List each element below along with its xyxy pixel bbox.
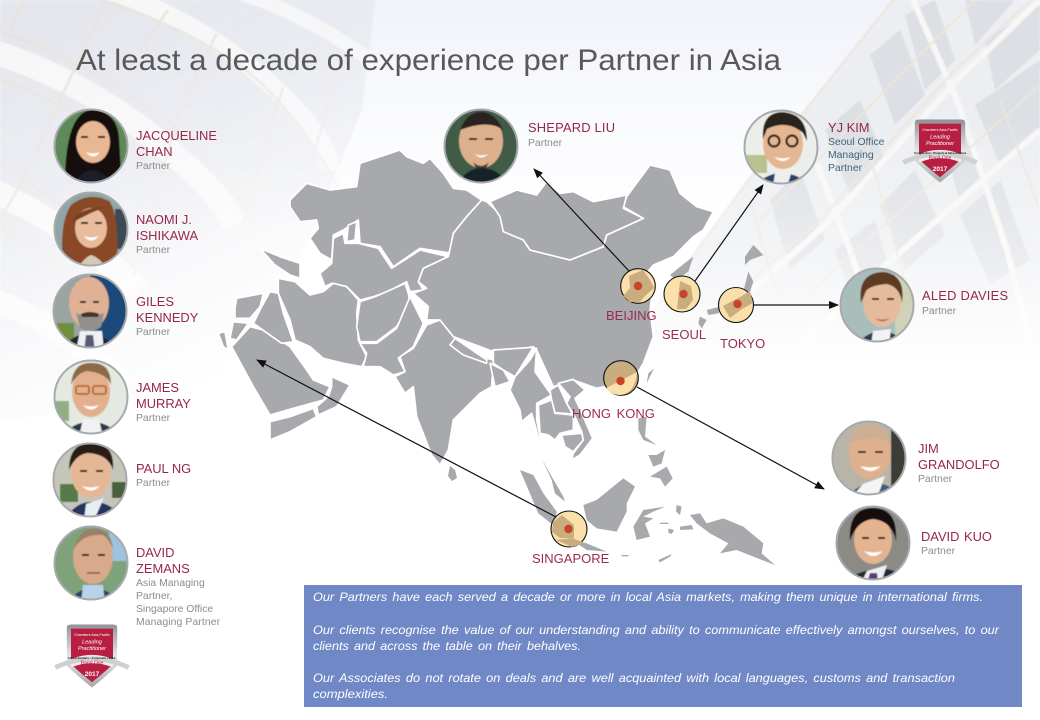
arrow: Seoul to YJ Kim (695, 185, 763, 281)
west and central Asia countries (218, 150, 713, 465)
name and role: KENNEDY (136, 310, 199, 325)
partner: Giles Kennedy (50, 271, 199, 351)
name and role: Partner (918, 474, 953, 485)
marker: Beijing (621, 269, 655, 303)
name and role: YJ KIM (828, 120, 870, 135)
name and role: ALED DAVIES (922, 288, 1008, 303)
name and role: MURRAY (136, 396, 191, 411)
south-east Asia mainland (490, 347, 593, 460)
badge: Chambers Asia-Pacific, David Zemans: Chambers Asia-Pacific (74, 633, 110, 637)
badge: Chambers Asia-Pacific, David Zemans: Practitioner (78, 646, 107, 652)
city label: Singapore: SINGAPORE (532, 551, 610, 566)
portrait: David Kuo (836, 506, 910, 580)
portrait: YJ Kim (744, 110, 818, 184)
name and role: Partner (136, 245, 171, 256)
portrait: Aled Davies (840, 268, 914, 342)
islands: Japan, Korea, Taiwan, Indonesia, Philippines, New Guinea (448, 245, 775, 565)
arrow: Hong Kong to Jim Grandolfo and David Kuo (637, 387, 824, 489)
name and role: JAMES (136, 380, 179, 395)
partner: David Zemans (51, 523, 221, 628)
callout paragraph 2: clients and across the table on their behalves. (313, 639, 581, 653)
name and role: Partner (922, 306, 957, 317)
badge: Chambers Asia-Pacific, YJ Kim: Chambers Asia-Pacific (922, 128, 958, 132)
badge: Chambers Asia-Pacific, David Zemans: David Zemans - Corporate / M&A (68, 656, 116, 660)
name and role: Partner, (136, 591, 172, 602)
badge: Chambers Asia-Pacific, YJ Kim: 2017 (933, 166, 948, 173)
partner: Aled Davies (837, 265, 1008, 345)
name and role (918, 441, 1000, 485)
title: At least a decade of experience per Partner in Asia (76, 44, 781, 77)
name and role (922, 288, 1008, 317)
arrow: Beijing to Shepard Liu (534, 169, 629, 271)
badge: Chambers Asia-Pacific, David Zemans (54, 624, 130, 687)
partner: James Murray (51, 357, 191, 437)
name and role: Asia Managing (136, 578, 205, 589)
portrait: David Zemans (54, 526, 128, 600)
map of Asia (218, 150, 775, 565)
partner: YJ Kim (741, 107, 885, 187)
badge: Chambers Asia-Pacific, David Zemans: 2017 (85, 671, 100, 678)
name and role: JIM (918, 441, 939, 456)
callout paragraph 1: Our Partners have each served a decade or more in local Asia markets, making them unique in international firms. (313, 590, 983, 604)
marker: Tokyo (718, 288, 754, 322)
name and role: SHEPARD LIU (528, 120, 615, 135)
partner: Shepard Liu (441, 106, 615, 186)
partner: David Kuo (833, 503, 992, 583)
name and role: NAOMI J. (136, 212, 192, 227)
badge: Chambers Asia-Pacific, David Zemans: Band One (81, 660, 104, 666)
portrait: Naomi J. Ishikawa (54, 192, 128, 266)
portrait: Jacqueline Chan (54, 108, 128, 184)
name and role (528, 120, 615, 149)
name and role: Partner (136, 413, 171, 424)
marker: Seoul (664, 276, 700, 312)
name and role: Partner (528, 138, 563, 149)
name and role: Managing Partner (136, 617, 221, 628)
badge: Chambers Asia-Pacific, YJ Kim (902, 119, 978, 182)
name and role: Partner (136, 478, 171, 489)
badge: Chambers Asia-Pacific, YJ Kim: Leading (930, 134, 951, 140)
arrow: Singapore to Middle East (257, 360, 556, 517)
partner: Paul Ng (50, 440, 191, 520)
marker: Hong Kong (604, 361, 638, 395)
badge: Chambers Asia-Pacific, David Zemans: Leading (82, 639, 103, 645)
badge: Chambers Asia-Pacific, YJ Kim: Practitioner (926, 141, 955, 147)
callout paragraph 2: Our clients recognise the value of our understanding and ability to communicate effectively amongst ourselves, to our (313, 623, 1000, 637)
name and role (136, 212, 198, 256)
portrait: Jim Grandolfo (832, 420, 906, 496)
name and role: Singapore Office (136, 604, 213, 615)
arrow: Tokyo to Aled Davies (753, 304, 838, 306)
portrait: James Murray (54, 360, 128, 434)
name and role: JACQUELINE (136, 128, 217, 143)
background: building photo (0, 0, 1040, 328)
callout: blue text panel (304, 585, 1022, 707)
name and role: Partner (136, 161, 171, 172)
callout paragraph 3 (313, 671, 955, 701)
name and role: Partner (921, 546, 956, 557)
name and role (136, 380, 191, 424)
name and role: GILES (136, 294, 174, 309)
name and role: ISHIKAWA (136, 228, 198, 243)
name and role: Managing (828, 150, 874, 161)
city label: Beijing: BEIJING (606, 308, 657, 323)
name and role: CHAN (136, 144, 173, 159)
portrait: Giles Kennedy (52, 274, 128, 348)
name and role: DAVID (136, 545, 174, 560)
city label: Hong Kong: HONG KONG (572, 406, 655, 421)
marker: Singapore (551, 511, 587, 547)
callout paragraph 3: complexities. (313, 687, 388, 701)
portrait: Shepard Liu (444, 108, 518, 184)
name and role: Partner (136, 327, 171, 338)
city label: Seoul: SEOUL (662, 327, 706, 342)
name and role (828, 120, 885, 174)
name and role: ZEMANS (136, 561, 190, 576)
callout paragraph 3: Our Associates do not rotate on deals and are well acquainted with local languages, customs and transaction (313, 671, 955, 685)
name and role: DAVID KUO (921, 529, 992, 544)
partner: Jacqueline Chan (51, 106, 217, 186)
partner: Jim Grandolfo (829, 418, 1000, 498)
name and role (136, 294, 199, 338)
name and role (136, 545, 221, 628)
name and role: GRANDOLFO (918, 457, 1000, 472)
partner: Naomi J. Ishikawa (51, 189, 198, 269)
badge: Chambers Asia-Pacific, YJ Kim: Yongjae Kim - Projects & Infrastructure (914, 151, 967, 155)
name and role (136, 461, 191, 489)
name and role (136, 128, 217, 172)
name and role: Partner (828, 163, 863, 174)
name and role: Seoul Office (828, 137, 885, 148)
city label: Tokyo: TOKYO (720, 336, 765, 351)
name and role (921, 529, 992, 557)
name and role: PAUL NG (136, 461, 191, 476)
badge: Chambers Asia-Pacific, YJ Kim: Band One (929, 155, 952, 161)
portrait: Paul Ng (52, 442, 128, 518)
callout paragraph 2 (313, 623, 1000, 653)
